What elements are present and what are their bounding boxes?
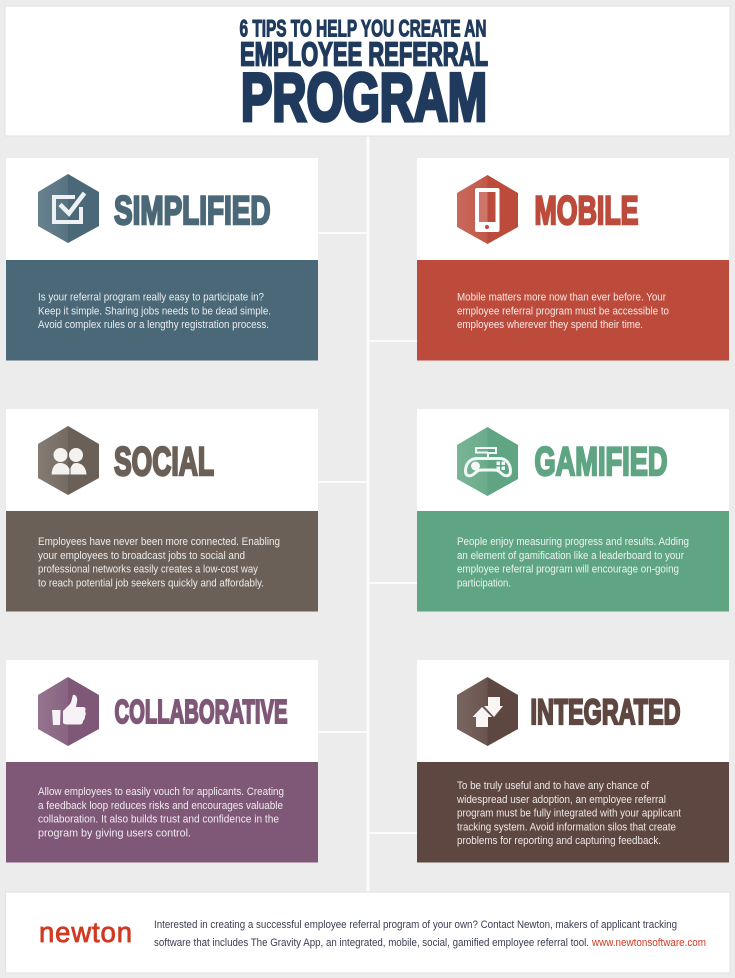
panel: integrated bbox=[417, 660, 729, 862]
text: mobile body bbox=[457, 292, 669, 331]
icon: arrows hexagon bbox=[457, 677, 518, 746]
title: PROGRAM bbox=[241, 60, 487, 136]
text: footer copy: Interested in creating a successful employee referral program of your own? Contact Newton, makers of applicant tracking bbox=[154, 919, 677, 931]
text: footer copy bbox=[154, 919, 706, 949]
title: 6 TIPS TO HELP YOU CREATE AN bbox=[240, 16, 486, 42]
icon: gamepad hexagon bbox=[457, 427, 518, 496]
text: integrated body: widespread user adoption, an employee referral bbox=[456, 794, 666, 806]
title: EMPLOYEE REFERRAL bbox=[240, 36, 488, 72]
text: social body: your employees to broadcast jobs to social and bbox=[38, 550, 245, 562]
panel: social bbox=[6, 409, 318, 612]
text: integrated body: program must be fully integrated with your applicant bbox=[457, 808, 682, 820]
text: gamified body: participation. bbox=[457, 577, 511, 589]
text: collaborative body: program by giving users control. bbox=[38, 827, 191, 839]
logo: newton: newton bbox=[39, 916, 132, 949]
text: mobile body: employees wherever they spend their time. bbox=[457, 319, 643, 331]
panel: simplified bbox=[6, 158, 318, 360]
text: integrated body bbox=[456, 780, 682, 847]
text: integrated body: To be truly useful and to have any chance of bbox=[457, 780, 650, 792]
text: mobile body: employee referral program must be accessible to bbox=[457, 305, 669, 317]
heading: simplified: SIMPLIFIED bbox=[114, 189, 270, 233]
text: footer copy: www.newtonsoftware.com bbox=[591, 937, 706, 949]
panel: collaborative bbox=[6, 660, 318, 862]
text: collaborative body: collaboration. It also builds trust and confidence in the bbox=[38, 814, 279, 826]
text: mobile body: Mobile matters more now than ever before. Your bbox=[457, 292, 666, 304]
connector lines bbox=[318, 136, 417, 892]
heading: collaborative: COLLABORATIVE bbox=[114, 693, 288, 730]
icon: people hexagon bbox=[38, 426, 99, 495]
text: gamified body: an element of gamification like a leaderboard to your bbox=[457, 550, 684, 562]
title bbox=[240, 16, 488, 136]
text: collaborative body: a feedback loop reduces risks and encourages valuable bbox=[38, 800, 283, 812]
heading: social: SOCIAL bbox=[114, 440, 214, 484]
text: footer copy: software that includes The Gravity App, an integrated, mobile, social, gamified employee referral tool. bbox=[154, 937, 589, 949]
text: social body: Employees have never been more connected. Enabling bbox=[38, 536, 280, 548]
text: integrated body: tracking system. Avoid information silos that create bbox=[457, 821, 676, 833]
heading: mobile: MOBILE bbox=[534, 189, 638, 233]
panel: gamified bbox=[417, 409, 729, 612]
heading: gamified: GAMIFIED bbox=[534, 440, 668, 484]
text: collaborative body: Allow employees to easily vouch for applicants. Creating bbox=[38, 786, 284, 798]
text: collaborative body bbox=[38, 786, 284, 839]
text: social body bbox=[38, 536, 280, 589]
text: gamified body bbox=[457, 536, 689, 589]
panel: mobile bbox=[417, 158, 729, 360]
icon: phone hexagon bbox=[457, 175, 518, 244]
text: social body: to reach potential job seekers quickly and affordably. bbox=[38, 577, 264, 589]
text: simplified body: Avoid complex rules or a lengthy registration process. bbox=[38, 319, 269, 331]
text: gamified body: employee referral program will encourage on-going bbox=[457, 564, 679, 576]
text: simplified body: Keep it simple. Sharing jobs needs to be dead simple. bbox=[38, 305, 271, 317]
icon: thumbs up hexagon bbox=[38, 677, 99, 746]
header panel bbox=[5, 6, 730, 136]
text: integrated body: problems for reporting and capturing feedback. bbox=[457, 835, 661, 847]
text: gamified body: People enjoy measuring progress and results. Adding bbox=[457, 536, 689, 548]
text: social body: professional networks easily creates a low-cost way bbox=[38, 564, 258, 576]
icon: checkbox hexagon bbox=[38, 174, 99, 243]
text: simplified body bbox=[38, 292, 271, 331]
text: simplified body: Is your referral program really easy to participate in? bbox=[38, 292, 264, 304]
footer panel bbox=[6, 892, 730, 973]
